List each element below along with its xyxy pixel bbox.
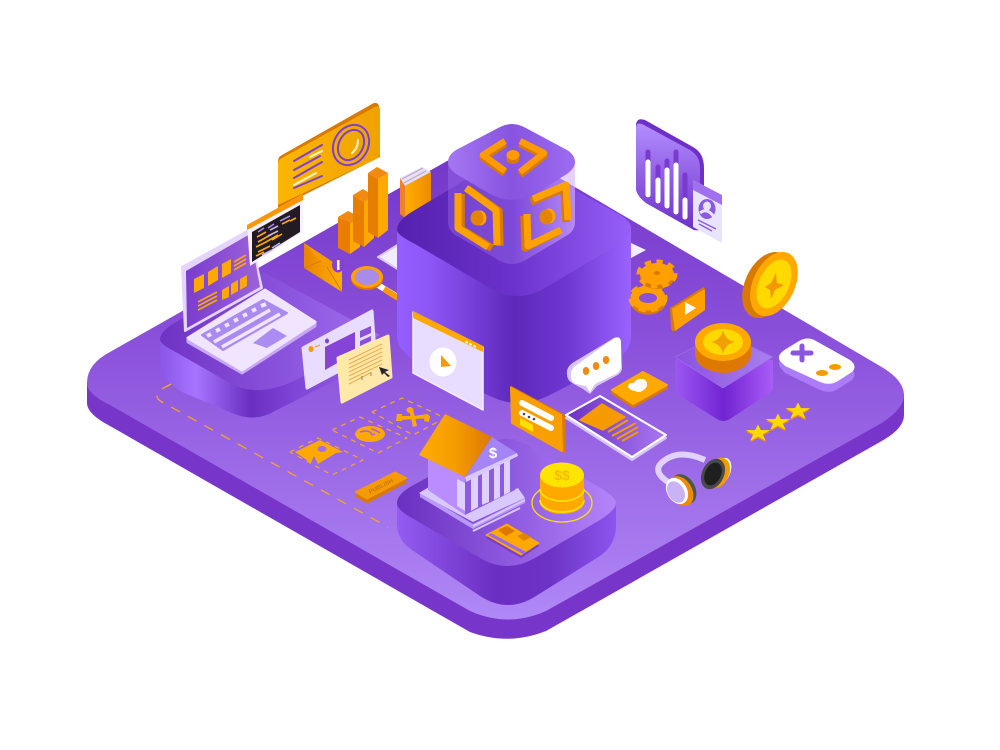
star 3	[786, 402, 810, 420]
floating coin	[732, 244, 807, 326]
bar 1	[338, 211, 360, 254]
cube icon left	[458, 188, 500, 248]
icon: globe	[355, 426, 385, 442]
central block	[397, 159, 631, 403]
publish tag: PUBLISH	[368, 478, 395, 496]
glass cube	[448, 124, 575, 264]
bank walls	[428, 455, 465, 515]
dashed box: ribbon	[290, 438, 363, 475]
block top	[397, 159, 631, 296]
speech bubble	[567, 337, 622, 394]
laptop base	[188, 290, 315, 373]
bank pedestal	[397, 439, 616, 605]
bank roof	[419, 414, 492, 477]
game controller	[779, 338, 855, 392]
rating stars	[746, 402, 810, 442]
heart card	[612, 372, 667, 407]
star 1	[746, 424, 770, 442]
bank columns	[457, 454, 510, 511]
small pedestal	[675, 333, 773, 421]
laptop screen	[182, 230, 262, 331]
keyboard	[202, 300, 287, 350]
publish tag	[355, 472, 407, 503]
glass side faces	[448, 162, 575, 264]
upper gear	[640, 263, 674, 289]
bank card	[486, 524, 539, 558]
headband	[658, 454, 705, 482]
platform base slab	[87, 383, 904, 639]
coin stack	[532, 462, 592, 522]
dashed route line	[157, 384, 388, 527]
terminal window	[247, 194, 303, 266]
bar 2	[353, 189, 374, 247]
floating orange info card	[278, 103, 380, 208]
platform top surface	[87, 143, 904, 620]
left ear cup	[661, 470, 702, 510]
icon: ribbon	[295, 440, 343, 464]
orange play card	[670, 287, 705, 331]
bank steps	[419, 487, 525, 531]
pediment: $	[489, 445, 498, 462]
bar chart	[338, 167, 388, 254]
coin stack: $$	[554, 467, 570, 483]
headphones	[658, 454, 735, 510]
icon: tools	[396, 407, 430, 427]
trackpad	[253, 328, 287, 348]
laptop pedestal	[160, 272, 380, 418]
browser window with image	[303, 311, 375, 388]
cursor	[379, 367, 390, 377]
note document with cursor	[338, 336, 391, 402]
panel bars	[648, 152, 685, 218]
envelope icon	[304, 243, 344, 292]
gears	[633, 263, 674, 310]
glass top face	[448, 124, 575, 200]
cube icon top	[483, 141, 544, 174]
white triangle behind block right	[631, 243, 646, 258]
coin on pedestal	[695, 323, 751, 373]
books	[400, 167, 431, 218]
video player window	[413, 311, 483, 410]
dashed box: globe	[332, 417, 407, 453]
bar 3	[368, 167, 388, 238]
right ear cup	[696, 454, 735, 493]
phone	[566, 396, 666, 460]
login card	[511, 387, 565, 452]
dashed box: tools	[372, 398, 445, 435]
star 2	[766, 414, 790, 431]
profile card	[693, 180, 722, 243]
lower gear	[633, 288, 663, 310]
white tablet behind block left	[378, 244, 399, 270]
laptop	[182, 230, 315, 373]
block sides	[397, 227, 631, 403]
cube icon right	[524, 185, 568, 248]
magnifier icon	[351, 266, 398, 298]
floating chart panel	[636, 119, 722, 243]
bank building	[419, 414, 525, 531]
